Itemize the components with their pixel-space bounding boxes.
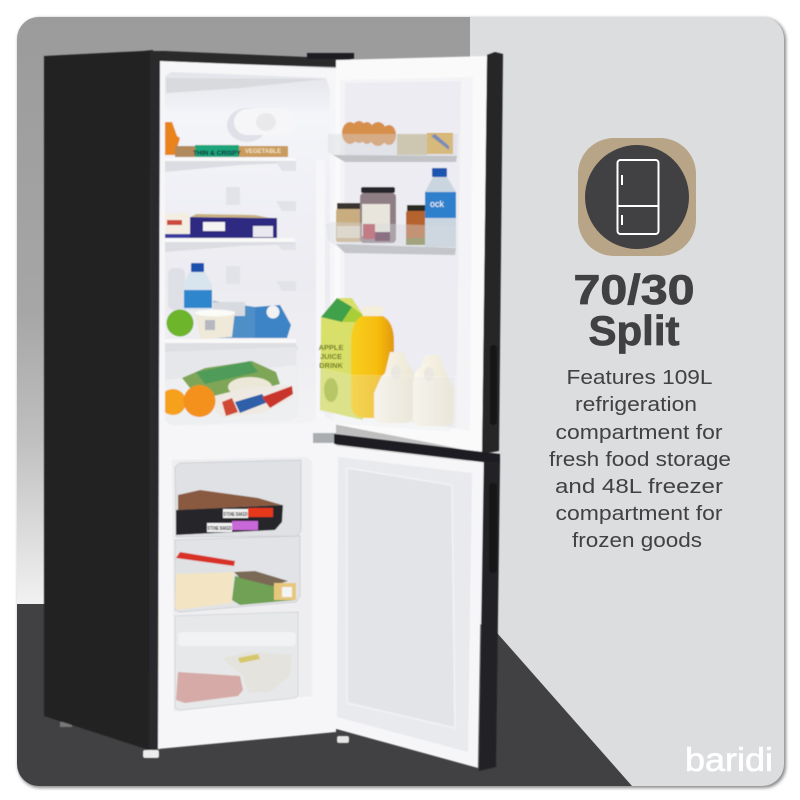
top shelf bbox=[165, 158, 296, 172]
lower cabinet divider bbox=[160, 420, 332, 456]
black door gap bbox=[334, 434, 500, 464]
freezer cavity bbox=[172, 457, 312, 712]
union flag bag bbox=[214, 385, 293, 417]
yoghurt pot bbox=[195, 310, 235, 339]
green bag label bbox=[196, 361, 258, 384]
apple juice carton: JUICE bbox=[320, 352, 342, 361]
egg and butter tray bbox=[328, 121, 458, 162]
white food box bbox=[165, 213, 191, 238]
floor: dark wedge bbox=[17, 604, 632, 786]
fan and light housing bbox=[227, 108, 296, 142]
milk jug left bbox=[374, 352, 415, 423]
cavity ceiling shade bbox=[166, 78, 325, 93]
upper door liner bbox=[333, 56, 487, 453]
cavity centre rail bbox=[316, 160, 325, 420]
back foot bbox=[60, 722, 72, 727]
water bottle: ock bbox=[430, 199, 445, 209]
upper freezer drawer bbox=[175, 460, 301, 537]
chutney jar bbox=[406, 205, 426, 245]
jars and water tray bbox=[326, 168, 456, 255]
icon: fridge badge bbox=[578, 138, 696, 256]
tray bbox=[326, 222, 456, 255]
cauliflower bbox=[228, 377, 272, 397]
heading second line: Split bbox=[588, 307, 680, 354]
description text: Features 109L bbox=[566, 367, 712, 389]
milk jug right bbox=[413, 355, 454, 426]
apple juice carton bbox=[318, 298, 363, 420]
lower door bbox=[329, 445, 483, 768]
badge tan rounded square bbox=[578, 138, 696, 256]
apple juice carton: APPLE bbox=[318, 343, 344, 352]
crisper drawer bbox=[164, 351, 296, 418]
bagged vegetables bbox=[182, 361, 280, 396]
pizza box on top shelf: VEGETABLE bbox=[245, 149, 281, 155]
butter block bbox=[397, 133, 453, 155]
orange juice bottle bbox=[351, 306, 394, 418]
rear milk bottle bbox=[168, 268, 185, 310]
description text bbox=[549, 367, 731, 552]
heading: 70/30 bbox=[574, 266, 694, 313]
water bottle bbox=[183, 263, 212, 310]
jam jar bbox=[360, 187, 396, 243]
shelf supports bbox=[226, 162, 296, 291]
mustard jar bbox=[336, 203, 361, 242]
logo: baridi: baridi bbox=[685, 741, 773, 778]
eggs bbox=[342, 121, 396, 146]
tray bbox=[328, 134, 458, 162]
egg box bbox=[165, 122, 180, 155]
fridge freezer photo bbox=[44, 50, 503, 771]
hinge bracket bbox=[313, 433, 337, 443]
description text: compartment for bbox=[556, 422, 723, 444]
fridge side panel bbox=[44, 50, 153, 750]
description text: refrigeration bbox=[575, 394, 697, 416]
pizza box on top shelf: THIN & CRISPY bbox=[193, 150, 241, 157]
door bin bbox=[319, 368, 455, 432]
refrigerator cavity bbox=[165, 72, 330, 427]
door compartment bottles bbox=[318, 298, 455, 432]
front foot bbox=[143, 750, 159, 758]
purple stone baked label: STONE BAKED bbox=[208, 526, 232, 532]
meat tray bbox=[176, 672, 243, 703]
wall: right light panel bbox=[470, 17, 784, 786]
red stone baked label: STONE BAKED bbox=[224, 512, 248, 518]
description text: and 48L freezer bbox=[555, 476, 723, 498]
pizza box: front bbox=[176, 505, 283, 535]
wrapped food bbox=[222, 652, 292, 693]
green apple bbox=[166, 310, 194, 336]
front black edge bbox=[149, 52, 160, 750]
lower shelf bbox=[165, 339, 298, 352]
cabinet front frame bbox=[158, 61, 336, 749]
middle shelf bbox=[165, 238, 295, 252]
front orange bbox=[184, 385, 216, 417]
badge dark circle bbox=[585, 145, 689, 249]
wall: left grey gradient bbox=[17, 17, 470, 607]
description text: fresh food storage bbox=[549, 449, 731, 471]
upper door black edge bbox=[482, 52, 503, 454]
green food box bbox=[232, 571, 296, 605]
navy food box bbox=[190, 214, 277, 238]
pizza box on top shelf bbox=[175, 145, 288, 157]
yellow label bbox=[238, 654, 260, 663]
blue milk carton bbox=[213, 301, 291, 338]
lower door black edge bbox=[479, 462, 500, 771]
rear orange bbox=[160, 389, 186, 415]
door foot bbox=[337, 736, 349, 743]
description text: compartment for bbox=[556, 503, 723, 525]
middle freezer drawer bbox=[175, 536, 300, 612]
apple juice carton: DRINK bbox=[319, 361, 343, 370]
pizza box: top crust bbox=[178, 490, 282, 510]
top trim and hinge bbox=[150, 51, 354, 67]
cheese tub bbox=[175, 552, 235, 610]
bottom freezer drawer bbox=[175, 612, 298, 710]
description text: frozen goods bbox=[572, 530, 702, 552]
fridge outline bbox=[618, 160, 658, 234]
